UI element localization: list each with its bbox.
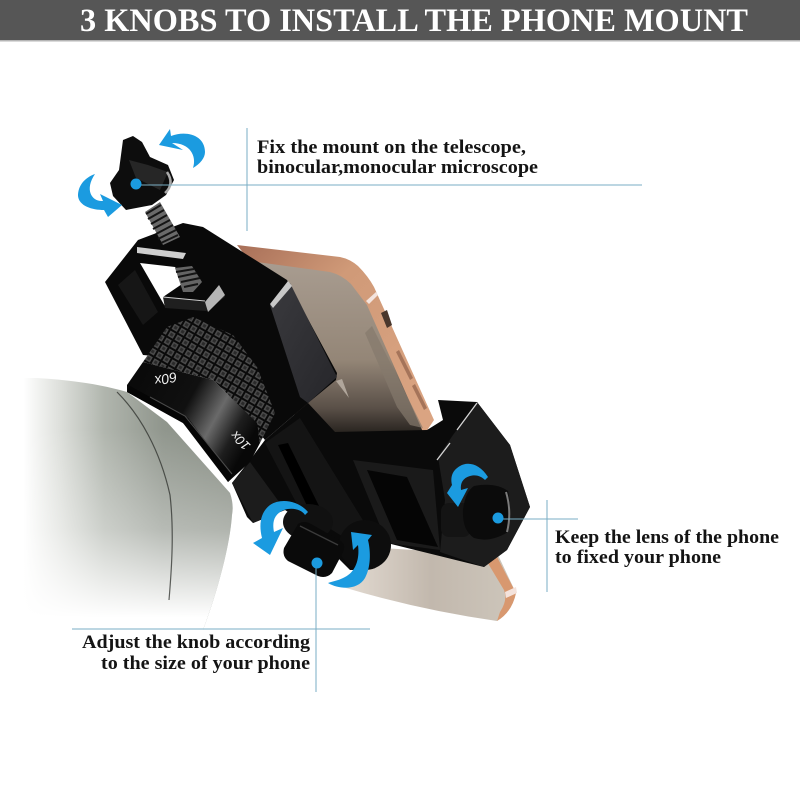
top screw: [145, 202, 202, 292]
mounting slot: [278, 443, 320, 512]
focus barrel with 60x and 10x markings: [127, 317, 275, 482]
phone lower end: [346, 548, 516, 621]
callout: keep the lens: Keep the lens of the phone: [555, 528, 779, 548]
top knob: [110, 136, 174, 210]
10x marking: 10x: [227, 428, 253, 453]
icon: rotation arrow right knob: [447, 464, 488, 507]
telescope body: [0, 378, 233, 630]
sliding rail panel: [353, 460, 440, 550]
callout: fix the mount: [257, 138, 538, 178]
title banner: [0, 0, 800, 42]
icon: rotation arrows bottom-left knob: [253, 501, 372, 588]
callout: fix the mount: Fix the mount on the telescope,: [257, 138, 526, 158]
marker dots: [130, 178, 504, 568]
right clamp block: [438, 402, 530, 567]
icon: rotation arrows top knob: [78, 129, 205, 217]
lower mount body: [232, 400, 530, 570]
leader lines: [72, 128, 642, 692]
bracket side column: [270, 283, 337, 403]
phone upper back and frame: [237, 245, 434, 432]
bottom-left knob: [283, 504, 391, 577]
callout: keep the lens: [555, 528, 779, 568]
callout: fix the mount: binocular,monocular microscope: [257, 158, 538, 178]
title: 3 KNOBS TO INSTALL THE PHONE MOUNT: [80, 3, 748, 39]
right knob: [441, 485, 510, 540]
60x marking: 60x: [152, 369, 178, 389]
phone: [237, 245, 517, 621]
knurled ring: [143, 317, 275, 443]
callout: keep the lens: to fixed your phone: [555, 548, 721, 568]
callout: adjust the knob: to the size of your phone: [101, 654, 310, 674]
black objective ring: [127, 362, 260, 482]
callout: adjust the knob: [82, 633, 311, 674]
top clamp bracket: [105, 223, 337, 440]
callout: adjust the knob: Adjust the knob according: [82, 633, 311, 653]
